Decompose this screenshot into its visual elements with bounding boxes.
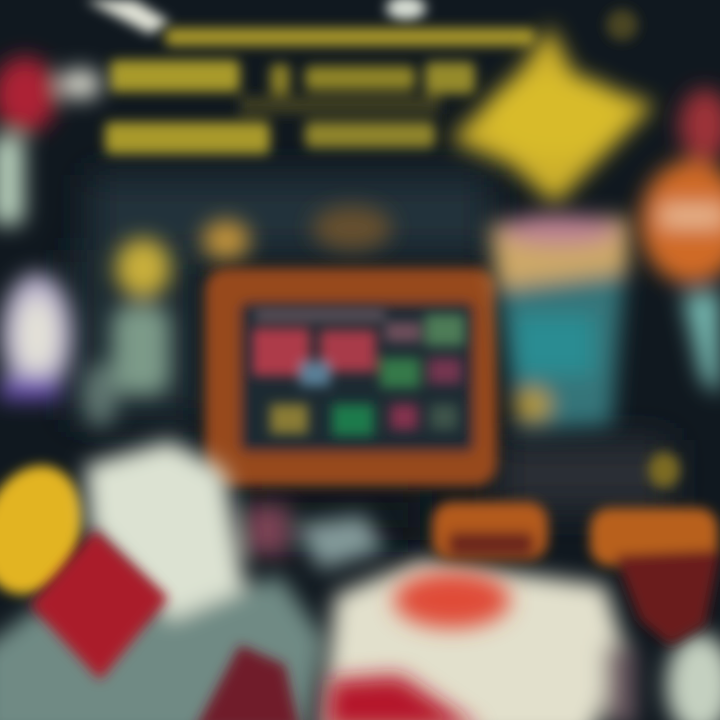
red die face <box>30 530 300 720</box>
gold star badge <box>450 25 655 205</box>
background haze <box>70 175 670 540</box>
large white die <box>0 440 385 720</box>
television frame <box>205 268 497 486</box>
left figures <box>0 57 392 427</box>
right edge ball and cup <box>640 89 720 395</box>
title banner <box>105 28 535 154</box>
orange cups <box>432 452 720 645</box>
yellow coin <box>0 452 98 608</box>
drink cup <box>490 215 630 430</box>
red die pips <box>325 572 510 720</box>
top light streaks <box>85 0 638 41</box>
screen tiles <box>252 310 465 436</box>
white die right <box>320 560 720 720</box>
